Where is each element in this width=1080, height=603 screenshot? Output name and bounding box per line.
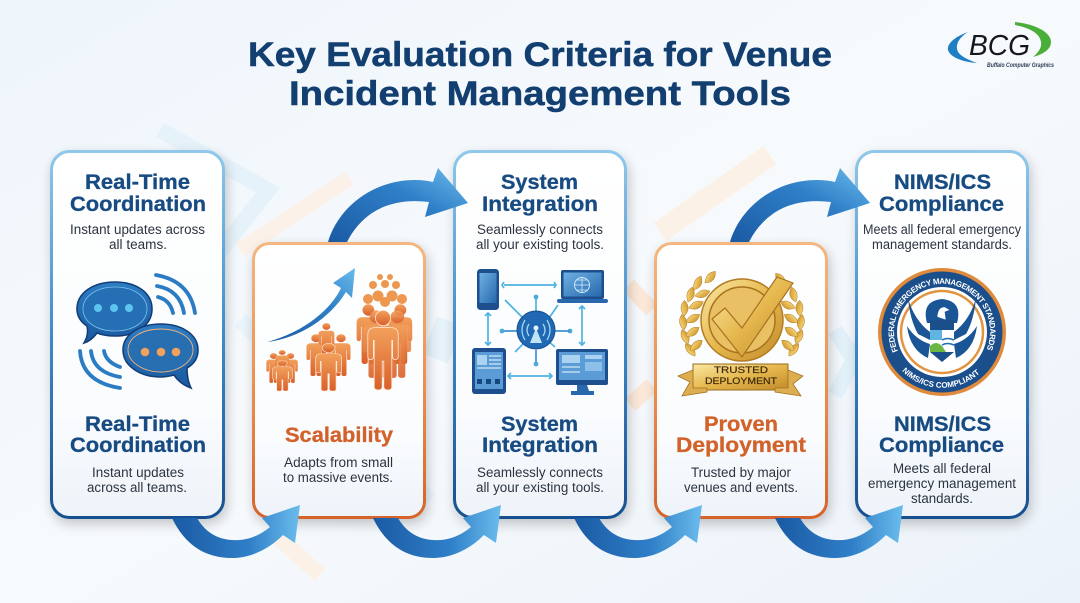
text: description top [70, 222, 205, 252]
panel: nims/ics compliance [851, 149, 1037, 530]
icon: trusted deployment badge: TRUSTED [714, 365, 768, 376]
text: deployment description [684, 465, 798, 495]
logo: BCG [948, 22, 1054, 69]
heading: system integration repeat: System [501, 413, 578, 436]
heading: system integration: System [501, 171, 578, 194]
icon: compliance seal: NIMS/ICS COMPLIANT [902, 367, 978, 388]
title: Key Evaluation Criteria for Venue [248, 36, 832, 74]
heading: scalability: Scalability [285, 424, 393, 447]
heading: real-time coordination: Coordination [70, 193, 206, 216]
heading: proven deployment [676, 413, 806, 457]
heading: proven deployment: Deployment [676, 434, 806, 457]
heading: real-time coordination repeat [70, 413, 206, 457]
arrow: bottom, integration to deployment [574, 505, 702, 558]
arrow: bottom, deployment to compliance [775, 505, 903, 558]
arrow: bottom, coordination to scalability [172, 505, 300, 558]
heading: system integration repeat [482, 413, 598, 457]
icon: trusted deployment badge [678, 270, 804, 396]
text: description bottom [87, 465, 187, 495]
icon: trusted deployment badge: DEPLOYMENT [705, 376, 777, 387]
text: integration description top: Seamlessly connects [477, 222, 603, 237]
text: compliance description bottom: Meets all federal [893, 461, 991, 476]
arrow: bottom, scalability to integration [373, 505, 501, 558]
arrow: top, deployment to compliance [730, 168, 870, 242]
text: deployment description: venues and events. [684, 480, 798, 495]
heading: real-time coordination: Real-Time [85, 171, 190, 194]
heading: system integration [482, 171, 598, 216]
text: deployment description: Trusted by major [691, 465, 791, 480]
text: scalability description [283, 455, 393, 485]
heading: system integration: Integration [482, 193, 598, 216]
title: Incident Management Tools [289, 75, 791, 113]
icon: compliance seal [878, 268, 1006, 396]
text: description top: Instant updates across [70, 222, 205, 237]
panel: real-time coordination [52, 152, 224, 518]
text: compliance description bottom [868, 461, 1016, 506]
text: integration description top [476, 222, 604, 252]
panel: scalability [254, 244, 424, 518]
heading: real-time coordination repeat: Coordination [70, 434, 206, 457]
heading: real-time coordination repeat: Real-Time [85, 413, 190, 436]
icon: chat bubbles [77, 275, 198, 388]
logo: BCG: BCG [969, 30, 1030, 62]
heading: nims/ics compliance repeat [879, 413, 1004, 457]
heading: proven deployment: Proven [704, 413, 778, 436]
text: compliance description bottom: emergency management [868, 476, 1016, 491]
text: scalability description: to massive events. [283, 470, 393, 485]
text: integration description bottom: Seamlessly connects [477, 465, 603, 480]
text: scalability description: Adapts from small [284, 455, 393, 470]
heading: real-time coordination [70, 171, 206, 216]
title [248, 36, 832, 113]
background chevrons [160, 130, 870, 575]
icon: compliance seal: FEDERAL EMERGENCY MANAGEMENT STANDARDS [888, 278, 996, 353]
heading: nims/ics compliance: Compliance [879, 193, 1004, 216]
text: compliance description top: management standards. [872, 237, 1012, 252]
icon: device network [472, 269, 608, 395]
heading: system integration repeat: Integration [482, 434, 598, 457]
heading: nims/ics compliance: NIMS/ICS [894, 171, 991, 194]
text: compliance description top [863, 222, 1021, 252]
panel: system integration [454, 152, 626, 518]
logo: BCG: Buffalo Computer Graphics [987, 62, 1054, 69]
text: compliance description top: Meets all federal emergency [863, 222, 1021, 237]
text: description top: all teams. [109, 237, 167, 252]
icon: growing crowd with arrow [266, 268, 412, 391]
panel: proven deployment [656, 244, 826, 518]
text: compliance description bottom: standards. [911, 491, 973, 506]
heading: nims/ics compliance [879, 171, 1004, 216]
heading: nims/ics compliance repeat: NIMS/ICS [894, 413, 991, 436]
text: description bottom: Instant updates [92, 465, 184, 480]
text: integration description bottom [476, 465, 604, 495]
text: description bottom: across all teams. [87, 480, 187, 495]
text: integration description bottom: all your existing tools. [476, 480, 604, 495]
heading: nims/ics compliance repeat: Compliance [879, 434, 1004, 457]
arrow: top, scalability to integration [328, 168, 468, 242]
text: integration description top: all your existing tools. [476, 237, 604, 252]
